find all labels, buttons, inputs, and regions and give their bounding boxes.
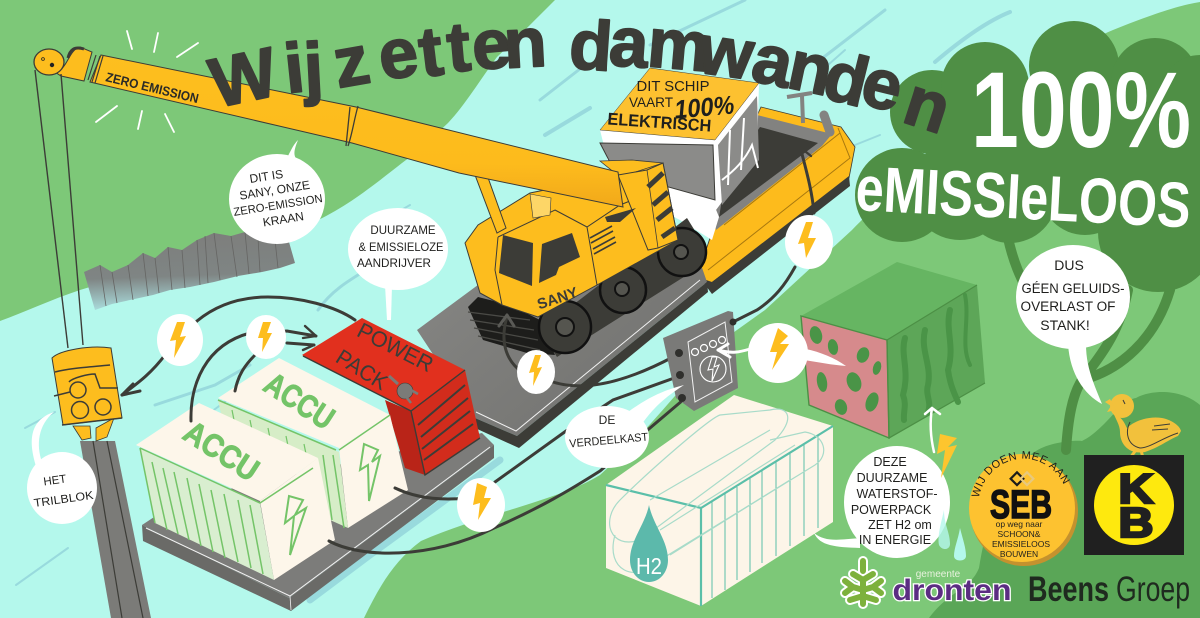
hill bottom right (929, 392, 1200, 618)
bubble: Dit is Sany: KRAAN (262, 209, 305, 229)
crane cables (35, 70, 83, 348)
accu 1 (136, 403, 335, 580)
crane strut (475, 172, 506, 233)
power pack label: PACK (332, 344, 393, 395)
bubble: Deze waterstof powerpack: DEZE (873, 455, 907, 469)
logo: SEB (969, 451, 1078, 566)
boom label: ZERO EMISSION (104, 69, 200, 106)
ship roof text: VAART (629, 94, 673, 110)
icon: H2 drop: H2 (636, 553, 662, 579)
SEB mark (1011, 472, 1033, 485)
bubble: Dus geen geluidsoverlast (1016, 245, 1130, 404)
bubble: Deze waterstof powerpack: DUURZAME (857, 471, 927, 485)
bubble: Deze waterstof powerpack: IN ENERGIE (859, 533, 931, 547)
icon: bolt outline (360, 444, 380, 501)
icon: plug (389, 376, 418, 403)
logo: SEB: EMISSIELOOS (992, 539, 1050, 549)
bubble: Deze waterstof powerpack: ZET H2 om (868, 518, 932, 532)
title: Wij zetten (203, 3, 548, 123)
bubble: De verdeelkast (565, 385, 684, 468)
bubble: Duurzame aandrijver: DUURZAME (370, 225, 436, 237)
logo: SEB: BOUWEN (1000, 549, 1038, 559)
logo: KB (1084, 455, 1184, 555)
bubble: Duurzame aandrijver: AANDRIJVER (357, 258, 431, 270)
icon: H2 drop (630, 505, 668, 582)
logo: Beens Groep (1028, 570, 1190, 609)
ship roof text: DIT SCHIP (636, 78, 710, 95)
accu deck barge (142, 433, 494, 611)
bubble: Dus geen geluidsoverlast: GÉEN GELUIDS- (1022, 281, 1124, 296)
node: cube to box (748, 323, 808, 383)
bubble: Duurzame aandrijver (348, 208, 448, 320)
accu 2 label: ACCU (258, 365, 341, 437)
bubble: Het trilblok: TRILBLOK (33, 490, 95, 510)
pile below vibratory block (80, 441, 151, 618)
pink-green cube (801, 262, 985, 438)
sparkle lines (96, 31, 198, 132)
arrow heads (122, 384, 140, 395)
bubble: Deze waterstof powerpack: WATERSTOF- (856, 487, 938, 501)
bubble: Dus geen geluidsoverlast: DUS (1054, 257, 1084, 273)
ship deck (712, 115, 832, 230)
bubble: Deze waterstof powerpack (814, 446, 950, 558)
icon: water drops (939, 510, 966, 560)
ship (600, 68, 855, 294)
tree stems (1008, 238, 1170, 450)
power pack label: POWER (353, 318, 438, 377)
title: damwanden (560, 2, 960, 148)
speech bubbles (27, 140, 1130, 558)
bubble: Dit is Sany (228, 140, 326, 244)
power pack (302, 318, 480, 475)
accu 2 (218, 358, 408, 528)
bubble: De verdeelkast: DE (599, 413, 615, 427)
logo: KB: K (1118, 465, 1154, 512)
accu 1 label: ACCU (177, 413, 266, 488)
icon: bolt outline (285, 496, 306, 555)
dronten icon (845, 561, 881, 604)
SEB arc text: WIJ DOEN MEE AAN (971, 451, 1070, 496)
node: accu link (246, 315, 286, 359)
bubble: Deze waterstof powerpack: POWERPACK (851, 503, 932, 517)
logo: gemeente Dronten: dronten (892, 574, 1012, 607)
cabin (600, 68, 759, 236)
crane body (465, 163, 678, 317)
vibratory block (trilblok) (52, 347, 122, 441)
ship roof text (607, 78, 735, 136)
sheet pile wall (84, 232, 295, 310)
crane windows (499, 235, 533, 286)
ship roof text: 100% (673, 89, 735, 125)
ship roof (600, 68, 759, 140)
crane deck barge (417, 180, 708, 448)
crane SANY label: SANY (535, 284, 580, 313)
node: accu to box (457, 478, 505, 532)
power cables and arrows (122, 148, 814, 553)
lightning circle nodes (157, 215, 966, 560)
crane tracks (468, 218, 706, 357)
bubble: Het trilblok (27, 412, 97, 524)
crane head pulley (55, 47, 92, 81)
crane: boom, head and body (34, 47, 706, 357)
power pack label (332, 318, 438, 395)
boom (90, 55, 623, 207)
cloud: green tree top (855, 21, 1200, 292)
logo: gemeente Dronten (845, 561, 1012, 607)
logo: Beens Groep: Beens (1028, 570, 1109, 609)
node: ship link (785, 215, 833, 269)
bubble: Het trilblok: HET (43, 473, 67, 488)
bubble: Dit is Sany: ZERO-EMISSION (233, 193, 323, 219)
hydrogen power pack box (606, 395, 833, 606)
logo: SEB: SEB (990, 483, 1052, 527)
bubble: Duurzame aandrijver: & EMISSIELOZE (358, 242, 444, 254)
icon: bolt in box (708, 357, 719, 381)
distribution box (663, 311, 738, 411)
arrow: cube to node (803, 349, 846, 366)
ship roof text: ELEKTRISCH (607, 109, 712, 136)
arrow: hydrogen up to cube (925, 408, 940, 452)
ship hull (698, 107, 855, 284)
bubble: Dus geen geluidsoverlast: OVERLAST OF (1020, 299, 1116, 314)
icon: bolt near waterstof (937, 434, 957, 478)
node: trilblok link (157, 314, 203, 366)
logo: KB: B (1118, 499, 1154, 546)
node: crane link (517, 350, 555, 394)
icon: duck (1105, 394, 1181, 458)
logo: SEB: op weg naar (996, 519, 1043, 529)
bubble: Dit is Sany: DIT IS (249, 167, 284, 186)
bubble: Dus geen geluidsoverlast: STANK! (1040, 317, 1090, 333)
bubble: De verdeelkast: VERDEELKAST (569, 432, 649, 450)
arrow: node to box (718, 344, 750, 357)
bubble: Dit is Sany: SANY, ONZE (238, 178, 311, 203)
logo: gemeente Dronten: gemeente (916, 569, 961, 580)
logo: SEB: SCHOON& (998, 529, 1041, 539)
